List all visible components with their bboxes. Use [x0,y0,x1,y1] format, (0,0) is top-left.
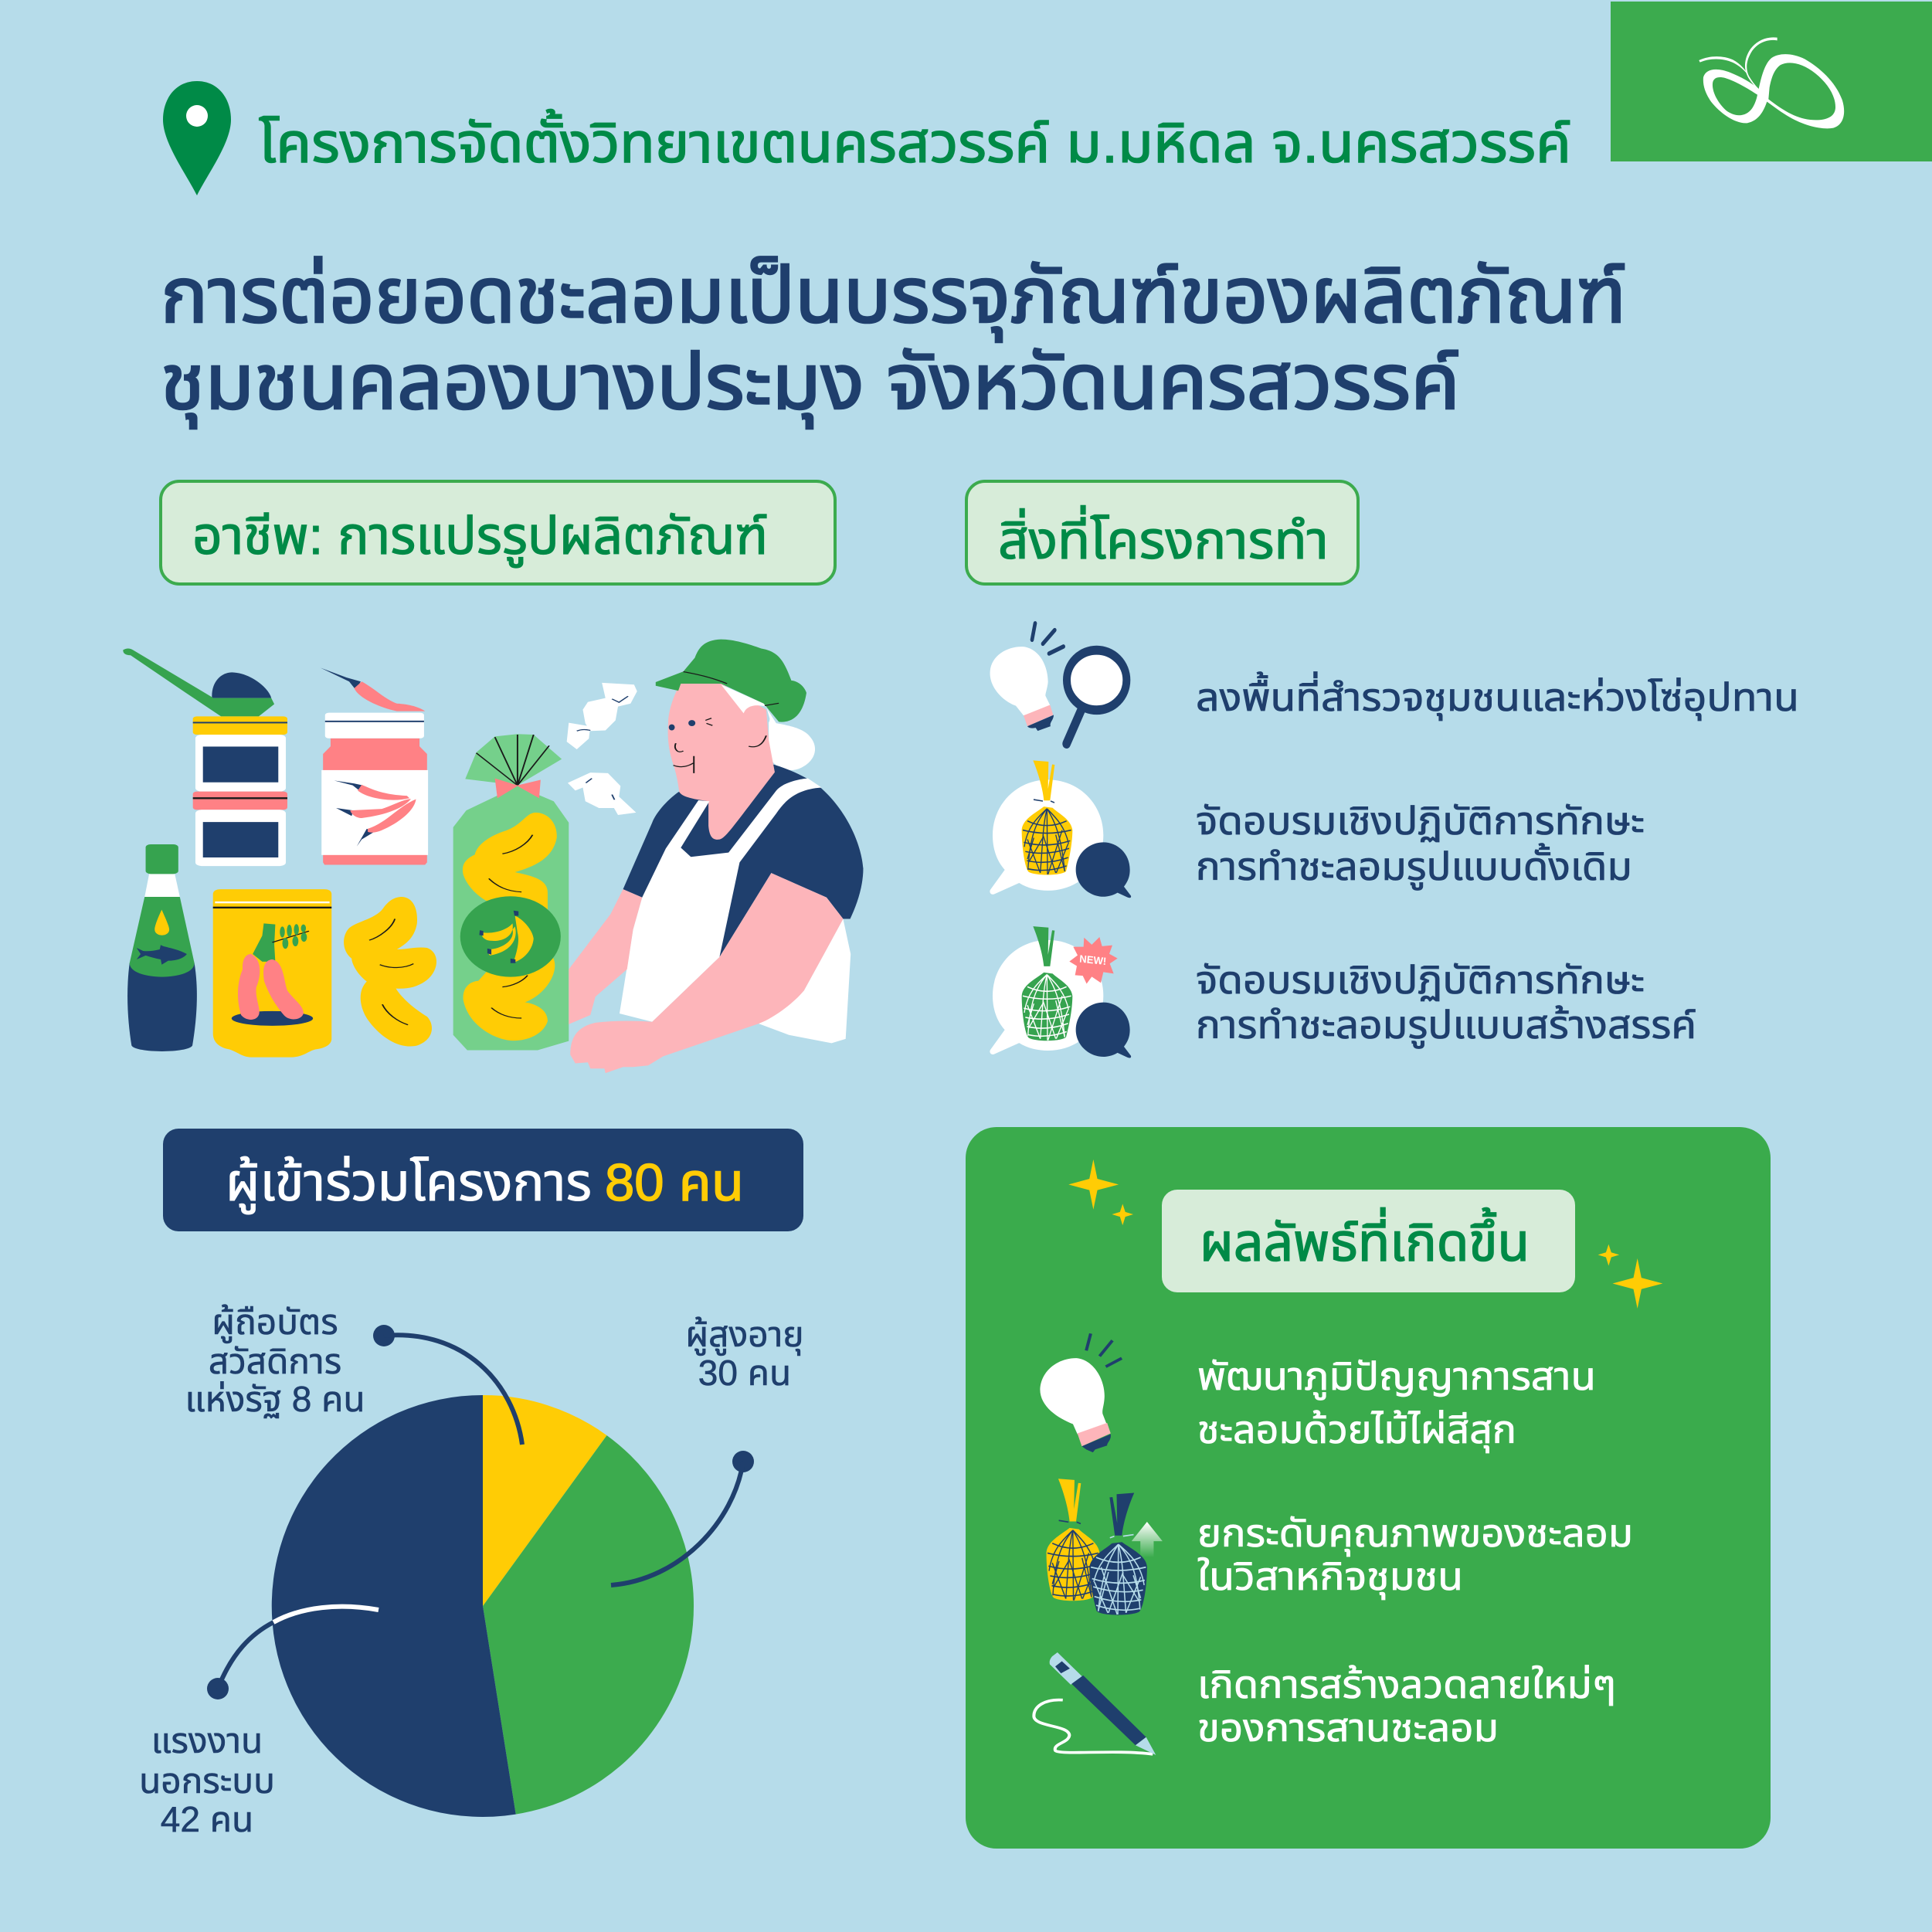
logo mark [1699,37,1844,128]
jars [193,716,287,866]
icon: creative basket speech bubble [990,926,1131,1058]
participants banner: ผู้เข้าร่วมโครงการ [226,1153,592,1214]
pie chart [207,1325,754,1817]
green bag of snacks [453,734,569,1050]
activity list text: ลงพื้นที่สำรวจชุมชนและห่วงโซ่อุปทาน [1196,671,1799,721]
pie label: welfare card holders: สวัสดิการ [209,1341,341,1381]
candy wrappers aroma [567,683,637,815]
leader: elderly [611,1451,754,1585]
icon: traditional basket speech bubble [990,760,1131,898]
results text: ชะลอมด้วยไม้ไผ่สีสุก [1197,1408,1516,1453]
pie label: informal labour: 42 คน [161,1799,253,1839]
activity list text: การทำชะลอมรูปแบบดั้งเดิม [1196,843,1632,890]
sauce bottle [127,844,197,1051]
results text: ในวิสาหกิจชุมชน [1197,1555,1463,1600]
results heading: ผลลัพธ์ที่เกิดขึ้น [1200,1207,1530,1272]
pie label: welfare card holders: ผู้ถือบัตร [212,1302,338,1343]
panel: project activities label: สิ่งที่โครงการทำ [998,505,1329,570]
pie label: elderly [685,1314,804,1393]
grandmother figure [569,640,863,1073]
results text: เกิดการสร้างลวดลายใหม่ๆ [1197,1663,1616,1706]
pie label: welfare card holders: แห่งรัฐ 8 คน [185,1379,365,1419]
main title: การต่อยอดชะลอมเป็นบรรจุภัณฑ์ของผลิตภัณฑ์ [161,253,1626,342]
yellow bag with sausages [213,889,331,1058]
results icons [1034,1160,1662,1755]
results heading [1162,1190,1575,1292]
leader: welfare card holders [373,1325,522,1445]
banana emblem [479,911,534,963]
main title [161,253,1626,429]
activity list text: จัดอบรมเชิงปฏิบัติการทักษะ [1196,959,1645,1002]
sparkles [1068,1160,1662,1309]
pie label: elderly: ผู้สูงอายุ [685,1314,804,1356]
logo panel [1611,2,1932,161]
results text: พัฒนาภูมิปัญญาการสาน [1197,1355,1596,1400]
participants banner [163,1129,803,1231]
loose yellow snack [344,897,436,1047]
ladle [123,649,274,716]
icon: location pin [163,81,231,195]
panel: occupation label: อาชีพ: การแปรรูปผลิตภัณฑ์ [192,507,768,568]
chili jar [321,667,428,864]
project location heading: โครงการจัดตั้งวิทยาเขตนครสวรรค์ ม.มหิดล จ.นครสวรรค์ [259,109,1571,175]
leader: informal labour [207,1607,379,1699]
icon: bulb [1040,1333,1122,1452]
participants banner: 80 คน [605,1153,744,1212]
results text: ของการสานชะลอม [1197,1706,1499,1750]
activity icons [990,623,1131,1058]
icon: bulb and magnifier [990,623,1126,744]
candy marks [577,696,628,800]
icon: creative basket speech bubble: NEW! [1079,953,1107,967]
activity list text: จัดอบรมเชิงปฏิบัติการทักษะ [1196,800,1645,843]
panel: results [966,1127,1771,1849]
pie label: informal labour [139,1720,275,1839]
panel: project activities label [966,481,1358,584]
pie label: elderly: 30 คน [698,1353,791,1393]
results text: ยกระดับคุณภาพของชะลอม [1197,1512,1633,1557]
main title: ชุมชนคลองบางประมุง จังหวัดนครสวรรค์ [161,339,1460,429]
illustration: products and grandmother [123,640,863,1073]
results text [1197,1355,1633,1750]
icon: baskets with arrow [1047,1479,1163,1615]
panel: occupation label [161,481,835,584]
pie label: informal labour: นอกระบบ [139,1761,275,1801]
icon: pencil and scribble [1034,1652,1156,1755]
activity list text: การทำชะลอมรูปแบบสร้างสรรค์ [1196,1003,1696,1048]
pie label: informal labour: แรงงาน [151,1720,263,1761]
pie label: welfare card holders [185,1302,365,1419]
activity list text [1196,671,1799,1048]
